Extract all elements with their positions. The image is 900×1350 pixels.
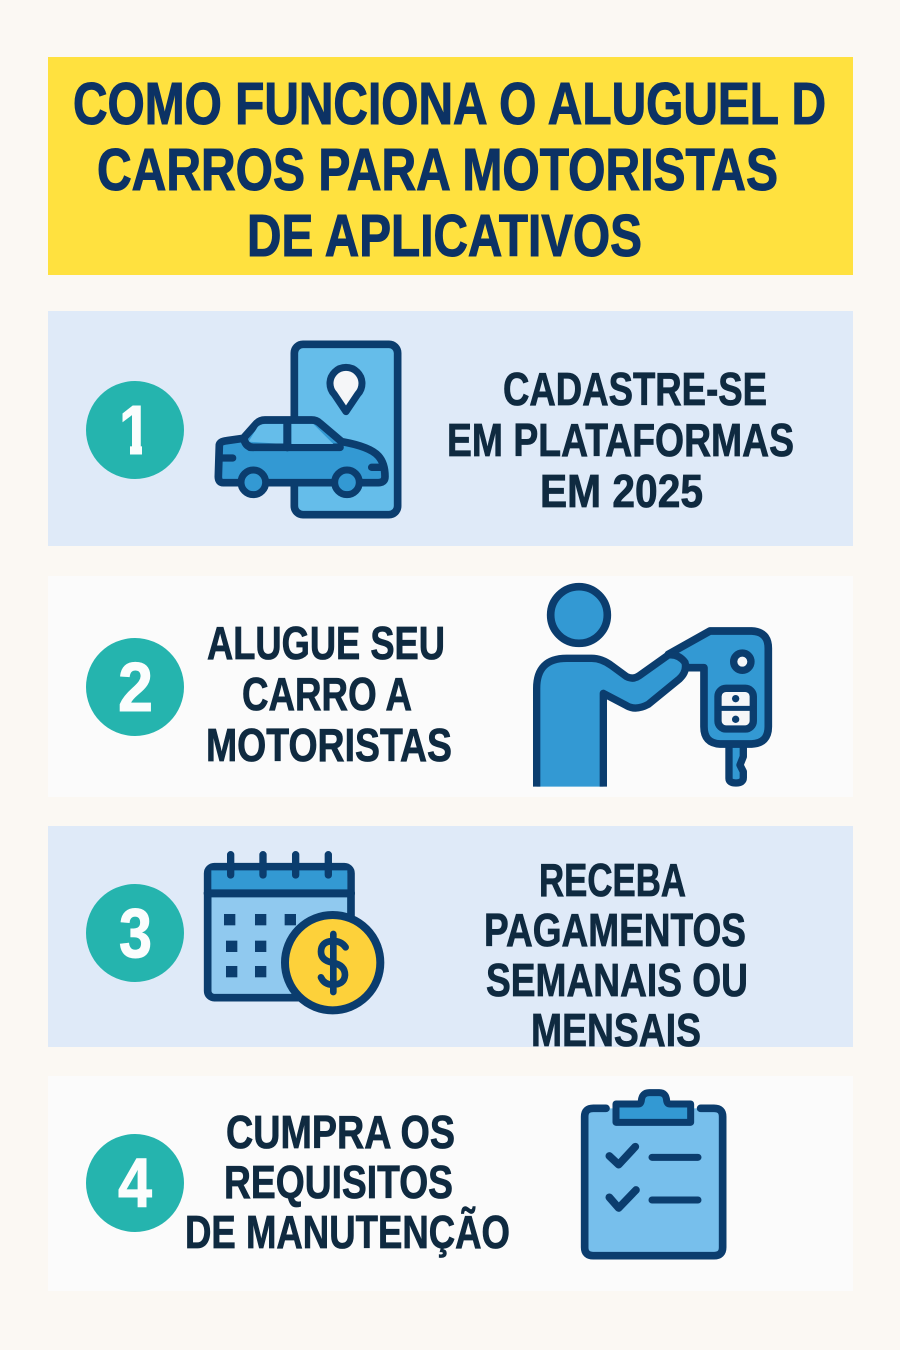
step 2 number badge: 2 [118, 648, 153, 726]
panel: step 2 [48, 576, 853, 797]
step 1 text: CADASTRE-SE [503, 363, 767, 415]
icon: person handing over car key [537, 587, 768, 787]
step 3 text [484, 854, 748, 1056]
step 4 text: REQUISITOS [224, 1156, 453, 1208]
step 3 text: MENSAIS [531, 1004, 701, 1056]
icon: calendar with dollar coin [208, 855, 380, 1010]
step 2 text [206, 617, 452, 771]
step 1 number badge: 1 [119, 391, 151, 469]
step 2 text: MOTORISTAS [206, 719, 452, 771]
step 2 text: CARRO A [242, 668, 412, 720]
step 4 number badge: 4 [118, 1144, 152, 1222]
step 3 number badge: 3 [119, 894, 152, 972]
step 1 text [447, 363, 794, 517]
step 4 text [185, 1106, 510, 1258]
step 4 text: DE MANUTENÇÃO [185, 1206, 510, 1258]
step 3 text: SEMANAIS OU [486, 954, 748, 1006]
title banner [48, 57, 853, 275]
panel: step 1 [48, 311, 853, 546]
step 4 number badge [86, 1134, 184, 1232]
step 3 number badge [86, 884, 184, 982]
step 2 text: ALUGUE SEU [207, 617, 445, 669]
step 1 text: EM PLATAFORMAS [447, 414, 794, 466]
title banner: DE APLICATIVOS [247, 203, 642, 269]
panel: step 3 [48, 826, 853, 1056]
step 1 number badge [86, 381, 184, 479]
step 3 text: RECEBA [539, 854, 686, 906]
step 1 text: EM 2025 [540, 465, 703, 517]
step 2 number badge [86, 638, 184, 736]
icon: car and phone with location pin [218, 344, 398, 515]
step 4 text: CUMPRA OS [226, 1106, 455, 1158]
panel: step 4 [48, 1076, 853, 1291]
step 3 text: PAGAMENTOS [484, 904, 746, 956]
icon: clipboard checklist [585, 1093, 723, 1256]
